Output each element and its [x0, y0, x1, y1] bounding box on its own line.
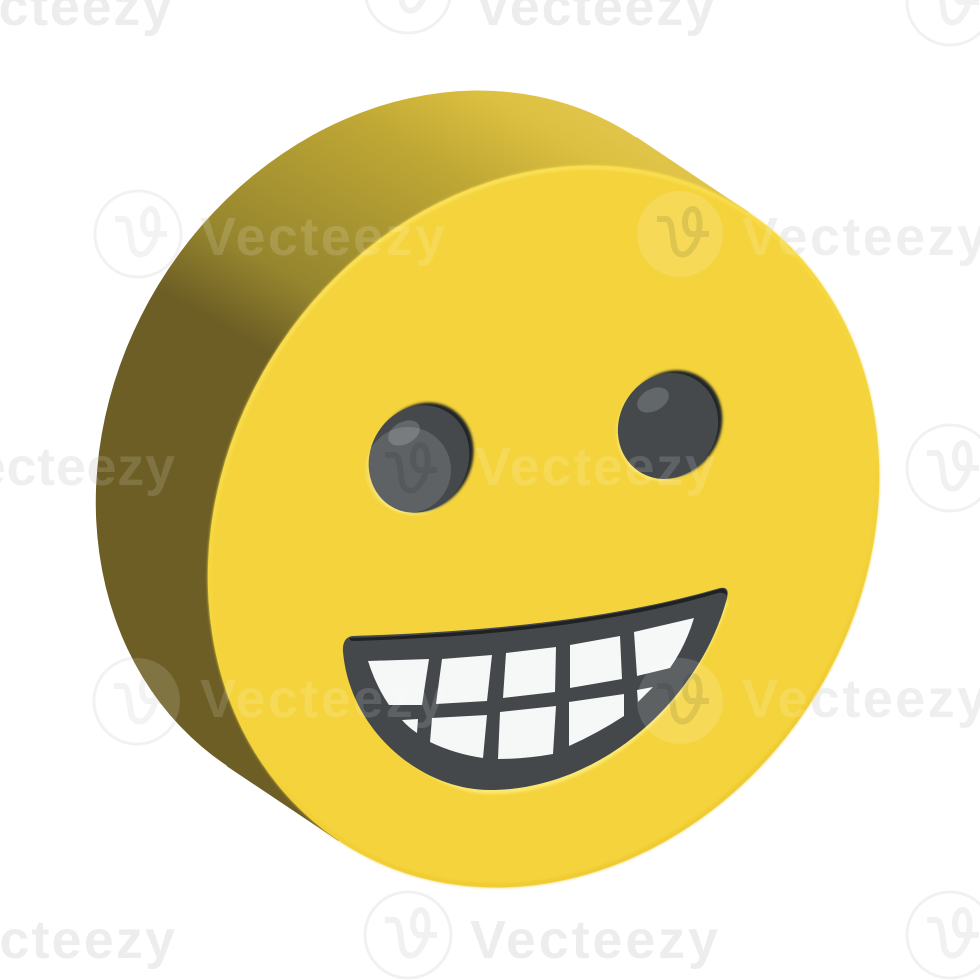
watermark overlay on emoji: Vecteezy — [200, 669, 445, 729]
watermark layer on background: Vecteezy — [475, 437, 715, 497]
watermark layer on background: Vecteezy — [200, 669, 445, 729]
watermark layer on background: Vecteezy — [742, 207, 980, 267]
mouth top shadow — [350, 589, 727, 641]
teeth — [368, 618, 694, 759]
watermark overlay on emoji: Vecteezy — [475, 437, 715, 497]
watermark overlay on emoji: Vecteezy — [200, 207, 445, 267]
watermark layer on background: Vecteezy — [470, 910, 718, 970]
emoji side wall — [96, 90, 748, 841]
left eye — [350, 385, 493, 533]
mouth highlight — [345, 600, 729, 794]
watermark layer on background: Vecteezy — [742, 669, 980, 729]
mouth — [343, 588, 729, 794]
mouth shape — [343, 588, 728, 790]
watermark layer on background: Vecteezy — [200, 207, 445, 267]
right eye — [598, 352, 741, 499]
watermark overlay on emoji: Vecteezy — [742, 669, 980, 729]
watermark overlay on emoji: Vecteezy — [742, 207, 980, 267]
watermark overlay on emoji — [0, 191, 980, 744]
